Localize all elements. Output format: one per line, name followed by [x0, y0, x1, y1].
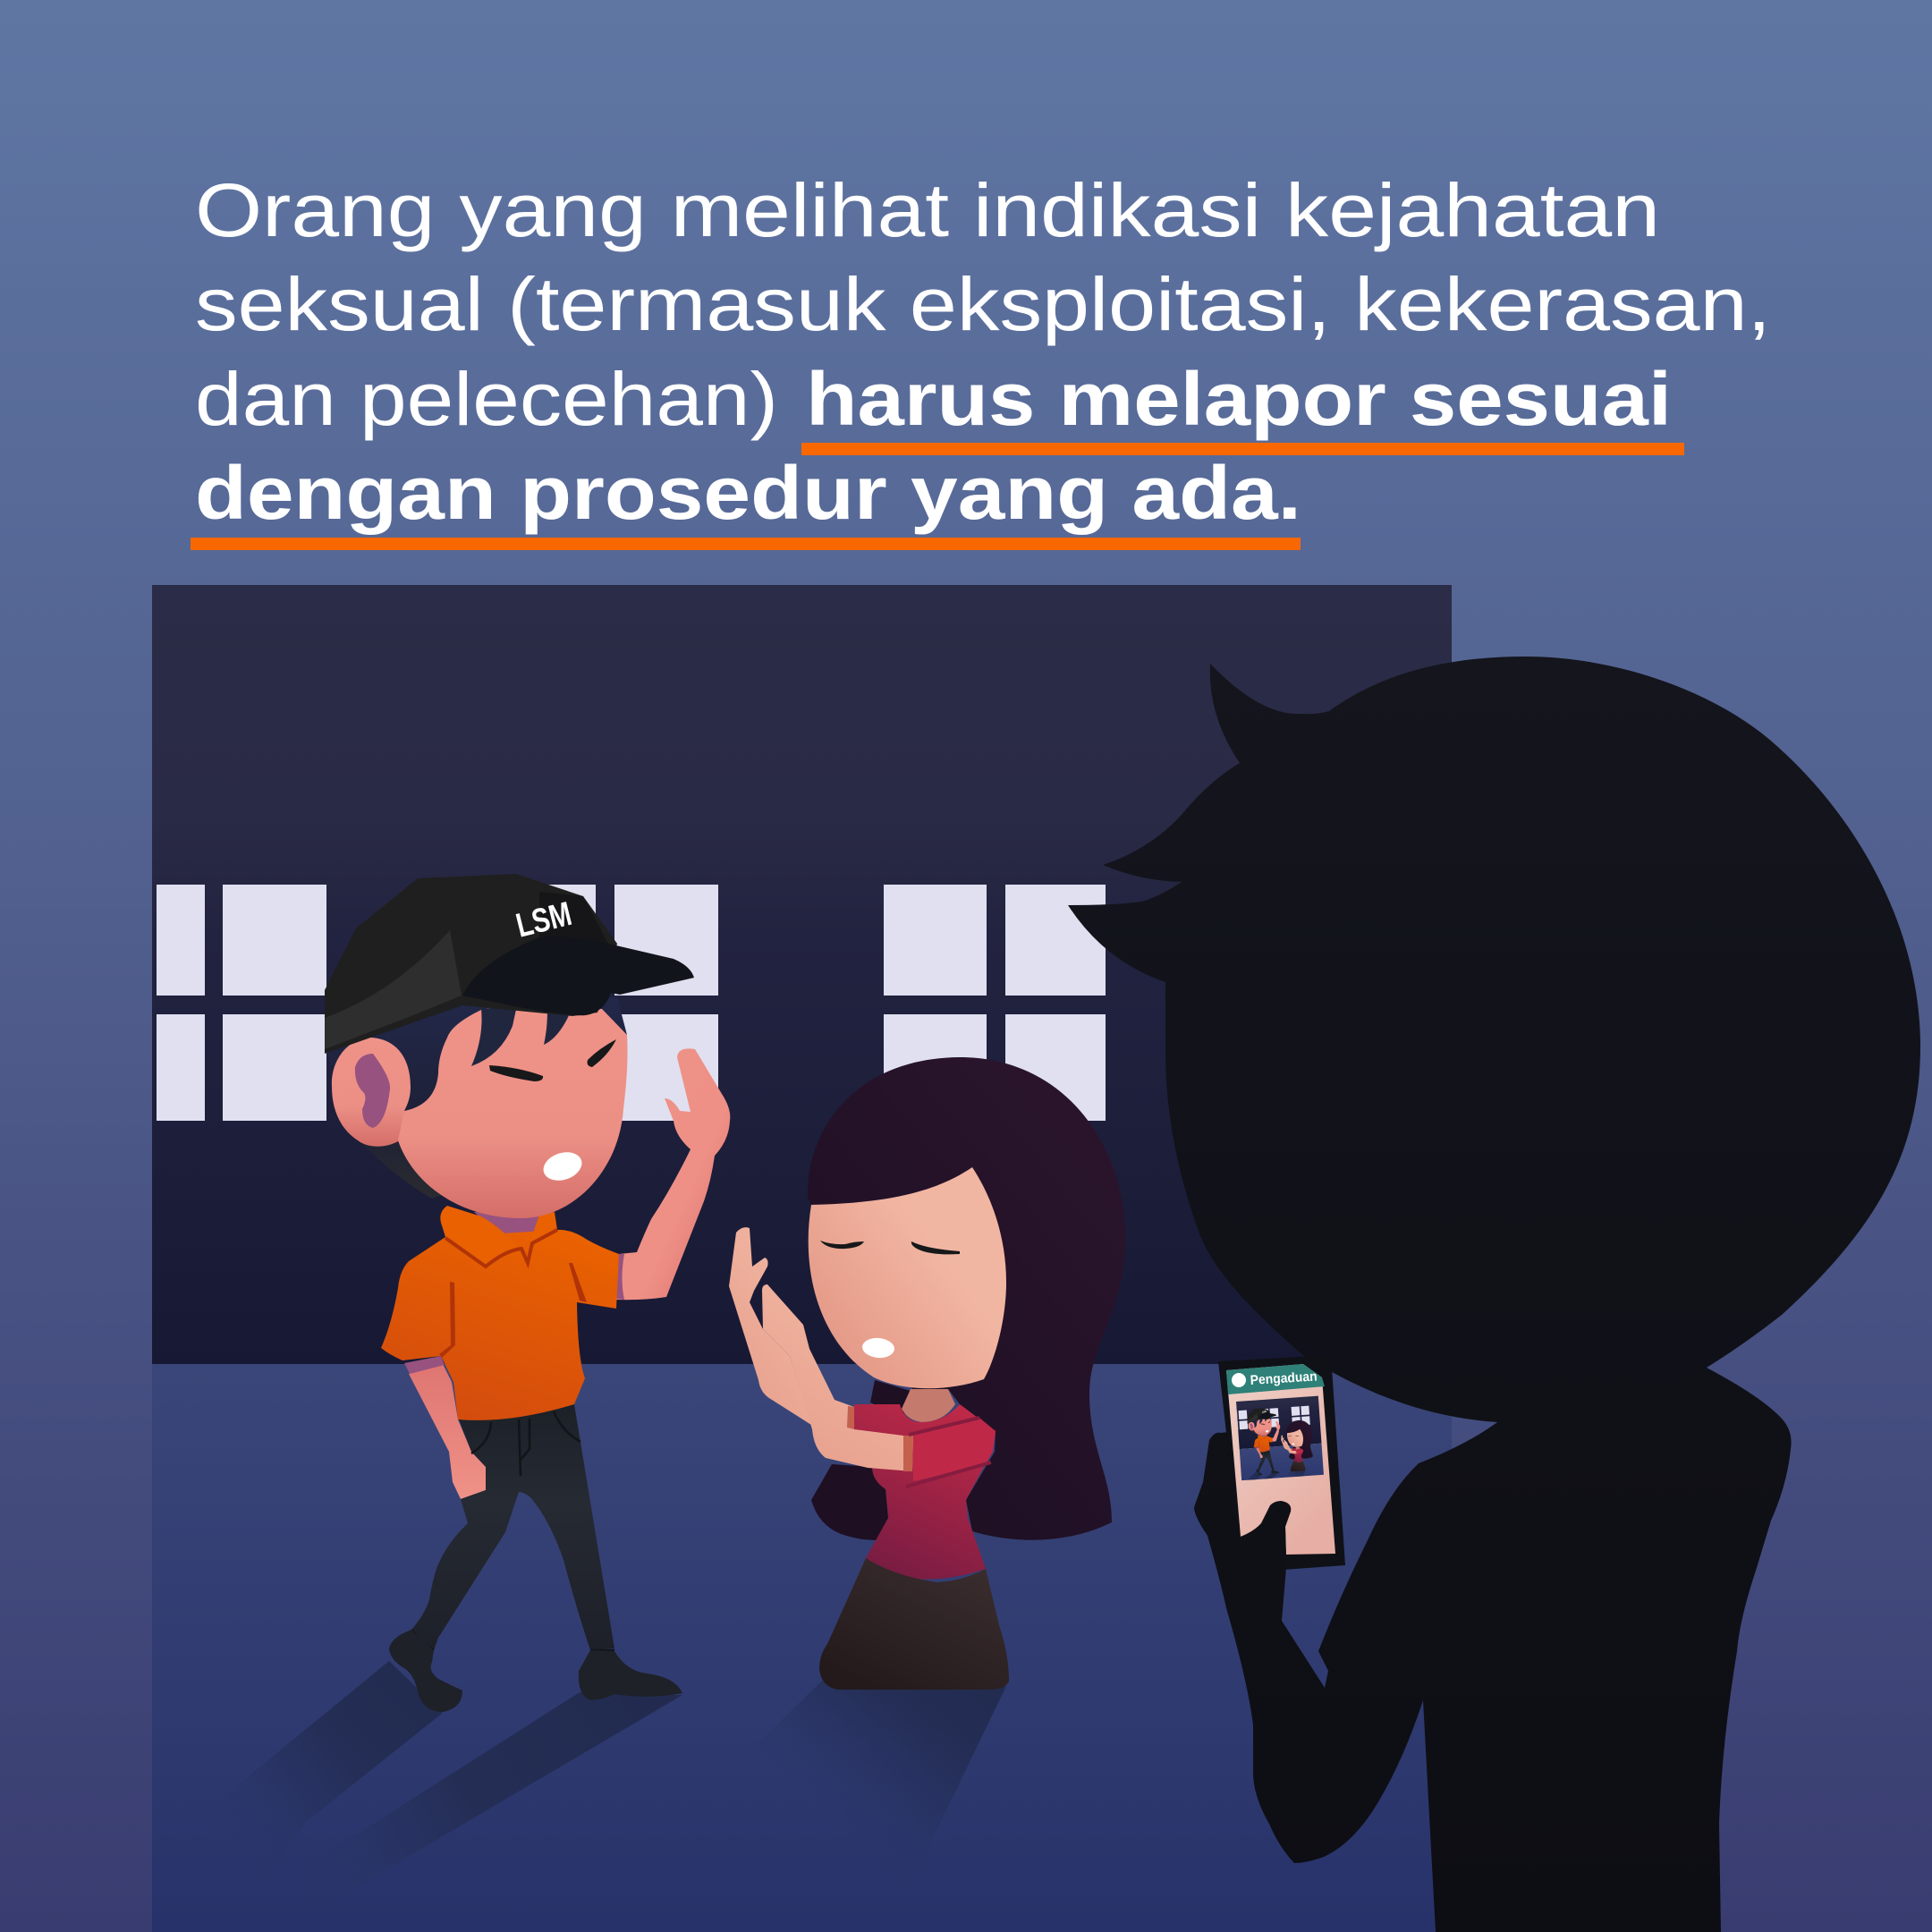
phone: app header	[1226, 1364, 1325, 1394]
woman: top	[850, 1404, 996, 1580]
man: inner ear	[355, 1054, 390, 1128]
underline: line 4	[191, 538, 1301, 550]
woman: neck	[902, 1389, 955, 1422]
man in orange shirt	[325, 874, 730, 1712]
phone	[1218, 1355, 1345, 1571]
heading line 2: seksual (termasuk eksploitasi, kekerasan,	[195, 262, 1771, 346]
man: neck	[474, 1208, 546, 1261]
man: left cuff	[404, 1356, 445, 1374]
woman: skirt	[819, 1558, 1009, 1690]
windows	[157, 885, 1106, 1121]
man: shirt folds	[439, 1263, 587, 1358]
man: hair back	[326, 997, 627, 1199]
man: fringe	[471, 1005, 570, 1066]
woman: hair	[808, 1057, 1125, 1540]
man: cap label: LSM	[513, 895, 575, 945]
woman: sleeve	[913, 1418, 996, 1481]
phone: photo of the scene	[1236, 1395, 1324, 1481]
phone: header label: Pengaduan	[1250, 1368, 1318, 1388]
woman: mouth	[861, 1336, 895, 1360]
shadows on floor	[206, 1661, 1006, 1923]
phone: case	[1218, 1355, 1345, 1571]
heading line 1: Orang yang melihat indikasi kejahatan	[195, 168, 1660, 252]
heading line 4 bold: dengan prosedur yang ada.	[195, 451, 1301, 535]
woman: lower-left hair	[811, 1464, 903, 1540]
man: raised arm	[616, 1048, 730, 1300]
heading line 3 bold: harus melapor sesuai	[806, 357, 1672, 441]
man: eyes	[489, 1039, 616, 1081]
man: ear	[332, 1038, 411, 1147]
man: collar	[440, 1206, 557, 1267]
heading line 3 regular: dan pelecehan)	[195, 357, 778, 441]
underline: line 3	[801, 443, 1684, 455]
heading	[191, 168, 1771, 550]
woman: face	[809, 1167, 1006, 1388]
man: left arm	[409, 1360, 486, 1499]
woman: front hand and arm	[762, 1284, 913, 1471]
phone: header dot	[1232, 1373, 1246, 1387]
woman: hair by neck	[870, 1380, 911, 1418]
man: trousers	[411, 1404, 614, 1650]
phone: screen	[1226, 1364, 1335, 1555]
man: left shoe	[389, 1630, 462, 1712]
silhouette thumb	[1241, 1501, 1291, 1574]
floor	[152, 1364, 1452, 1932]
silhouette of bystander	[1068, 657, 1920, 1932]
woman: back hand and forearm	[729, 1227, 811, 1425]
man: trouser seams	[411, 1411, 614, 1650]
woman: eyes	[820, 1241, 960, 1254]
street scene	[152, 585, 1452, 1932]
man: shirt	[381, 1230, 619, 1420]
man: face	[398, 1000, 628, 1218]
man: cap visor	[462, 936, 694, 1015]
woman: sleeve trim	[906, 1418, 991, 1487]
man: cap	[325, 874, 694, 1054]
woman: cuffs	[847, 1406, 913, 1471]
man: right shoe	[579, 1650, 682, 1700]
man: right cuff	[616, 1254, 624, 1300]
man: mouth	[539, 1148, 586, 1185]
woman in red top	[729, 1057, 1125, 1690]
building wall	[152, 585, 1452, 1364]
